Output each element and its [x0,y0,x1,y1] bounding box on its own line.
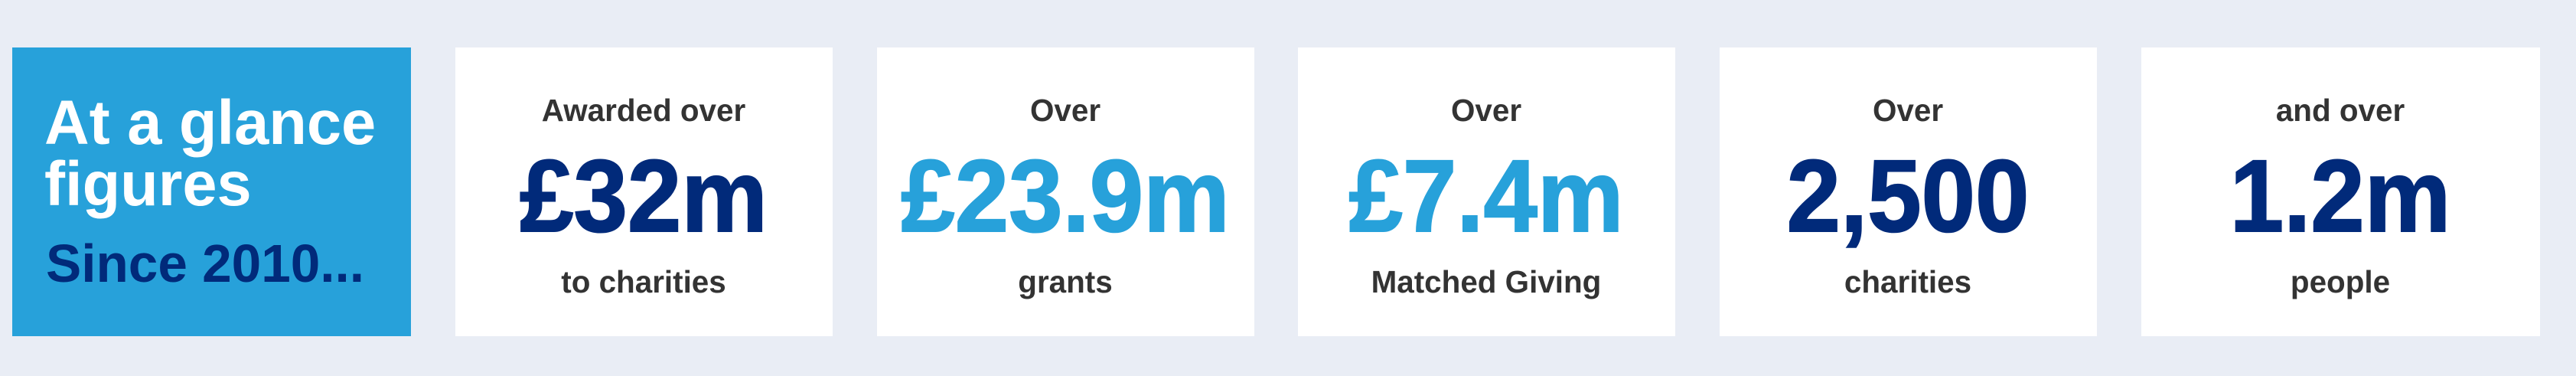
figure: 2,500: 2,500 [1787,139,2029,253]
label: people: people [2291,264,2390,299]
label: to charities: to charities [561,264,726,299]
figure: 1.2m: 1.2m [2230,139,2450,253]
label: grants: grants [1018,264,1113,299]
figure: £23.9m: £23.9m [901,139,1230,253]
label: over: Over [1873,93,1943,128]
label: and over: and over [2276,93,2405,128]
panel: £23.9m grants [877,47,1254,336]
heading: at a glance figures: At a glance [44,89,376,158]
panel: at a glance heading [12,47,411,336]
panel: 2,500 charities [1720,47,2097,336]
panel: £32m awarded [455,47,833,336]
label: awarded over: Awarded over [542,93,745,128]
subheading: since 2010: Since 2010... [46,234,364,293]
label: over: Over [1030,93,1101,128]
label: over: Over [1451,93,1521,128]
figure: £32m: £32m [520,139,768,253]
label: charities: charities [1844,264,1971,299]
label: matched giving: Matched Giving [1371,264,1601,299]
panel: £7.4m matched giving [1298,47,1675,336]
panel: 1.2m people [2141,47,2540,336]
heading: second line: figures [44,150,252,219]
figure: £7.4m: £7.4m [1348,139,1624,253]
